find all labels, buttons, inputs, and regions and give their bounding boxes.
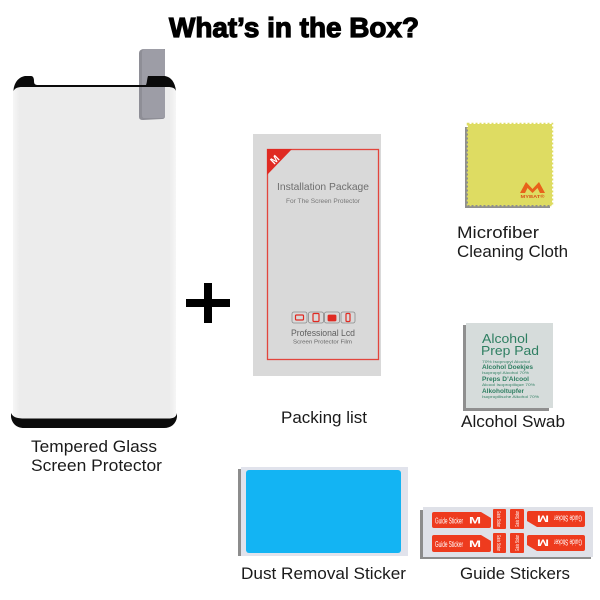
swab text: Alcohol bbox=[482, 331, 528, 346]
sticker backing bbox=[241, 467, 408, 556]
label: tempered glass bbox=[31, 437, 162, 475]
swab text: Prep Pad bbox=[481, 343, 539, 358]
dust removal sticker bbox=[238, 467, 408, 556]
right sticker top: M bbox=[537, 514, 549, 524]
package sheet bbox=[253, 134, 381, 376]
swab text: 70% Isopropyl Alcohol bbox=[482, 360, 530, 364]
label: microfiber cleaning cloth bbox=[457, 223, 568, 261]
swab text: Alcohol Doekjes bbox=[482, 365, 534, 371]
swab text: Isopropyl Alcohol 70% bbox=[482, 371, 530, 375]
swab text: Alkoholtupfer bbox=[482, 389, 525, 395]
left sticker bottom bbox=[432, 535, 491, 552]
swab packet bbox=[466, 323, 553, 408]
cloth bbox=[468, 124, 552, 205]
tempered glass screen protector bbox=[11, 49, 177, 428]
guide backing bbox=[423, 507, 593, 557]
left sticker top: M bbox=[469, 516, 481, 526]
glass body bbox=[13, 87, 176, 420]
installation package: Screen Protector Film bbox=[293, 340, 352, 346]
cloth logo bbox=[520, 182, 545, 193]
cloth pinked edge bbox=[468, 124, 552, 206]
bottom black frame bbox=[11, 413, 177, 428]
label: guide stickers: Guide Stickers bbox=[460, 564, 570, 583]
red corner logo bbox=[267, 149, 292, 175]
swab text bbox=[481, 331, 540, 399]
right sticker top bbox=[527, 511, 585, 527]
centre small stickers: Guide Sticker bbox=[495, 511, 501, 527]
swab text: Preps D’Alcool bbox=[482, 377, 529, 383]
label: tempered glass: Tempered Glass bbox=[31, 437, 157, 456]
label: packing list: Packing list bbox=[281, 408, 367, 427]
swab shadow bbox=[463, 325, 549, 411]
left sticker top bbox=[432, 512, 491, 528]
right sticker top: Guide Sticker bbox=[554, 514, 582, 522]
centre small stickers: Guide Sticker bbox=[515, 535, 521, 551]
installation package: M bbox=[269, 153, 282, 167]
left sticker bottom: Guide Sticker bbox=[435, 540, 463, 549]
guide stickers bbox=[420, 507, 593, 559]
installation package bbox=[253, 134, 381, 376]
sticker shadow bbox=[238, 469, 242, 556]
label: microfiber cleaning cloth: Cleaning Cloth bbox=[457, 242, 568, 261]
microfiber cloth bbox=[465, 124, 552, 208]
label: alcohol swab: Alcohol Swab bbox=[461, 412, 565, 431]
installation package: For The Screen Protector bbox=[286, 198, 361, 205]
right sticker bottom bbox=[527, 535, 585, 551]
plus sign bbox=[186, 283, 230, 323]
right sticker bottom: M bbox=[537, 538, 549, 548]
centre small stickers: Guide Sticker bbox=[515, 511, 521, 527]
centre small stickers bbox=[493, 509, 524, 553]
guide backing shadow bbox=[420, 510, 591, 559]
red frame bbox=[268, 150, 378, 360]
microfiber cloth: MYBAT® bbox=[520, 193, 545, 199]
grey pull tab bbox=[139, 49, 165, 120]
package footer text: Professional Lcd bbox=[291, 328, 355, 338]
top black frame bbox=[14, 76, 176, 91]
blue film bbox=[246, 470, 401, 553]
swab text: Alcool Isopropilique 70% bbox=[482, 383, 536, 387]
cloth shadow bbox=[465, 127, 550, 208]
left sticker bottom: M bbox=[469, 539, 481, 549]
title: What’s in the Box? bbox=[169, 12, 419, 43]
package heading: Installation Package bbox=[277, 181, 369, 193]
right sticker bottom: Guide Sticker bbox=[554, 538, 582, 546]
alcohol swab bbox=[463, 323, 553, 411]
left sticker top: Guide Sticker bbox=[435, 516, 463, 526]
device icons bbox=[292, 312, 355, 323]
swab text: Isopropilische Alkohol 70% bbox=[482, 395, 540, 399]
label: microfiber cleaning cloth: Microfiber bbox=[457, 223, 539, 242]
label: tempered glass: Screen Protector bbox=[31, 456, 162, 475]
centre small stickers: Guide Sticker bbox=[495, 535, 501, 551]
label: dust removal sticker: Dust Removal Sticker bbox=[241, 564, 406, 583]
